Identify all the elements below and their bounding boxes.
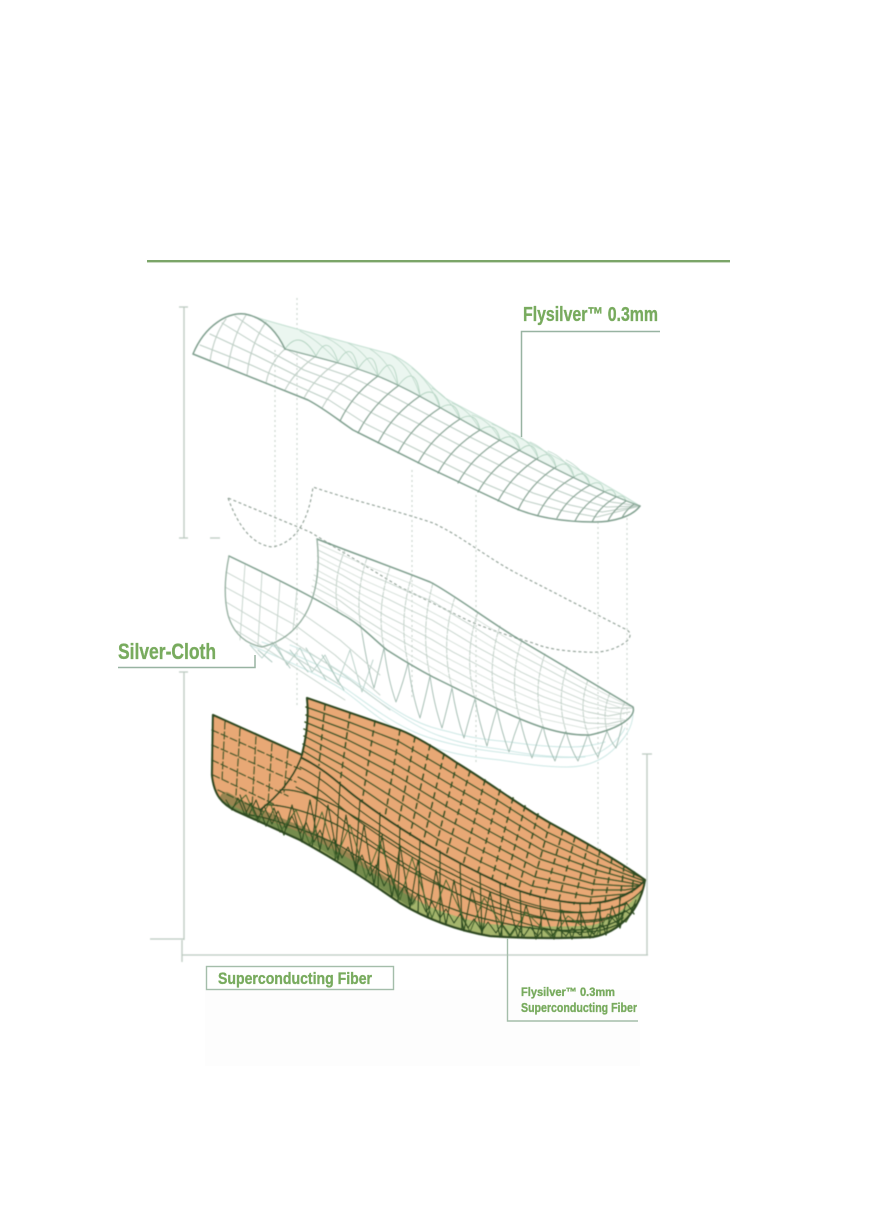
layer: Silver-Cloth mid mesh (225, 539, 633, 767)
layer: Superconducting Fiber orange sole (212, 698, 645, 939)
dome arcs (285, 340, 626, 501)
heel arc (260, 755, 302, 810)
ribs (336, 550, 625, 734)
light ribs near heel (210, 315, 358, 408)
dark ribs (340, 376, 634, 522)
callout: Flysilver and Superconducting Fiber composite (508, 938, 638, 1021)
dashed ribs (319, 705, 634, 904)
hull cross hatch near heel (250, 642, 373, 692)
top rule (147, 260, 730, 262)
olive lower band (222, 800, 643, 938)
outline (212, 698, 645, 938)
heel panel lines (212, 722, 302, 812)
orange body (212, 698, 645, 938)
dotted guide lines (275, 298, 627, 880)
callout: Flysilver and Superconducting Fiber composite: Flysilver™ 0.3mm (521, 985, 615, 999)
longitudinal mesh lines (312, 550, 633, 724)
heel outline (225, 539, 318, 647)
callout: Flysilver and Superconducting Fiber composite: Superconducting Fiber (521, 1000, 637, 1015)
dimension lines (150, 307, 652, 962)
hull V hatch (362, 633, 622, 761)
callout box: Superconducting Fiber: Superconducting Fiber (218, 969, 372, 988)
longitudinal mesh lines (200, 316, 640, 517)
exploded insole diagram (118, 260, 730, 1022)
layer: dashed outline (228, 487, 630, 652)
rim zigzag (240, 795, 634, 939)
heel panel mesh (225, 565, 390, 710)
hull faint rows (250, 642, 633, 767)
rim and upper outline (229, 539, 633, 735)
longitudinal mesh lines (303, 707, 644, 897)
dense bottom hatch (226, 798, 636, 936)
layer: Flysilver top mesh (193, 314, 640, 522)
outline (193, 314, 640, 522)
rim mesh rows (250, 790, 626, 930)
callout: Flysilver 0.3mm (522, 304, 660, 437)
callout: Flysilver 0.3mm: Flysilver™ 0.3mm (523, 304, 658, 326)
rim dense grid (226, 767, 643, 939)
callout: Silver-Cloth: Silver-Cloth (118, 639, 216, 664)
inner rim line (302, 758, 645, 903)
inner edge (285, 349, 640, 506)
dome shading (245, 314, 640, 506)
